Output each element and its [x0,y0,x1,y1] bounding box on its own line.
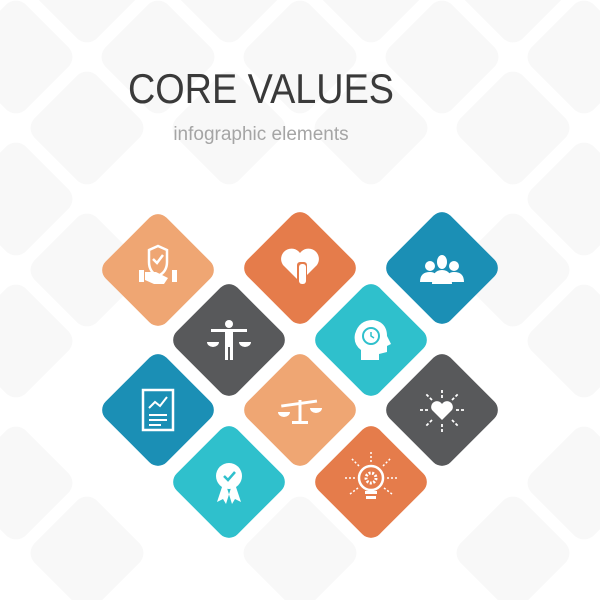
icon: bulb gear [343,452,399,499]
icon: balance scales [278,400,322,424]
panel: handshake shield [97,209,219,331]
title: CORE VALUES [128,65,394,112]
panel: scales [239,349,361,471]
panel: award [168,421,290,543]
panel: heart glow [381,349,503,471]
panel: people bulb [381,207,503,329]
icon: people [420,255,464,284]
icon: award badge [216,463,242,504]
icon: heart rays [420,388,464,432]
panel: bulb gear [310,421,432,543]
icon: man scales [207,320,251,360]
panel: head clock [310,279,432,401]
subtitle: infographic elements [173,124,349,145]
icon: heart hand [281,249,319,284]
panel: heart hand [239,207,361,329]
icon: head clock [355,320,391,360]
panel: report [97,349,219,471]
icon: shield handshake [139,246,177,284]
icon: report chart [143,390,173,430]
panel: man scales [168,279,290,401]
